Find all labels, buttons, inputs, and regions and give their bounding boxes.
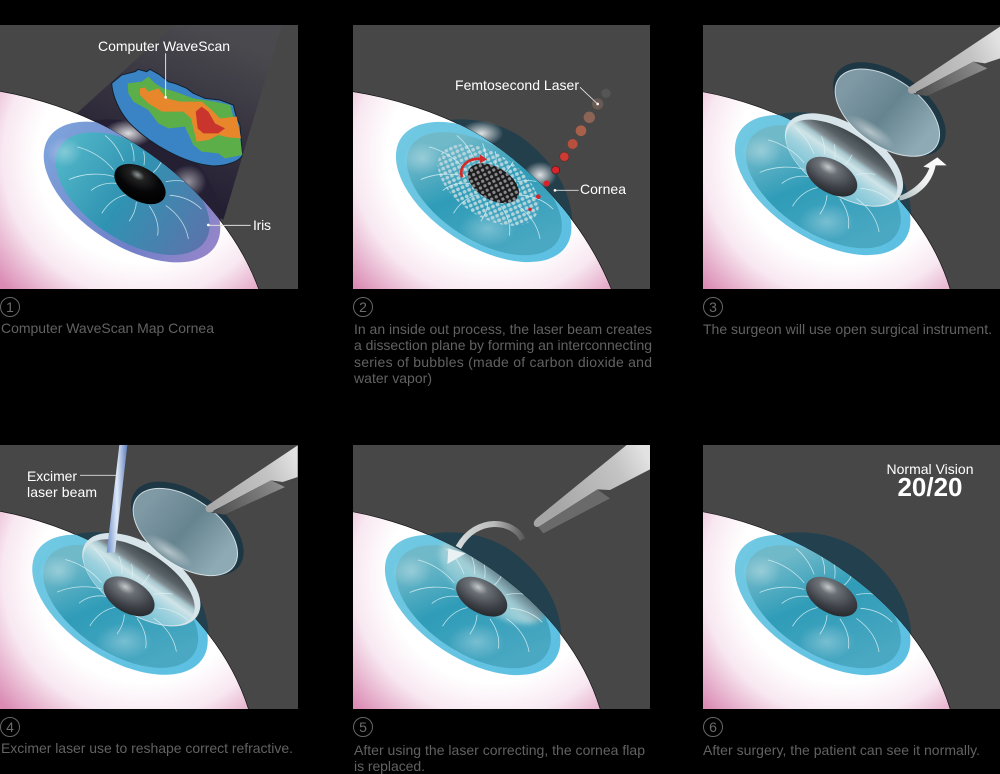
iris bbox=[44, 122, 220, 262]
step 3 number bbox=[704, 298, 722, 316]
step 2 caption: water vapor) bbox=[353, 370, 432, 386]
opened flap bed bbox=[57, 514, 216, 651]
label: laser beam line 2: laser beam bbox=[27, 484, 97, 500]
eyeball bbox=[347, 91, 612, 291]
lifted cornea flap bbox=[114, 462, 260, 595]
iris bbox=[32, 534, 208, 675]
step 3 caption: The surgeon will use open surgical instrument. bbox=[703, 321, 992, 337]
pupil bbox=[107, 156, 173, 212]
scan light cone bbox=[77, 25, 282, 220]
iris details bbox=[410, 549, 542, 652]
laser pulse dots bbox=[528, 89, 611, 211]
iris bbox=[396, 122, 572, 262]
pupil with bubble mesh bbox=[461, 155, 526, 211]
label: iris: Iris bbox=[253, 217, 271, 233]
wavescan map bbox=[112, 69, 242, 166]
lifted cornea flap bbox=[816, 43, 962, 176]
step 5 caption: is replaced. bbox=[354, 758, 425, 774]
label: computer wavescan: Computer WaveScan bbox=[98, 38, 230, 54]
panel 3: flap lifted bbox=[703, 25, 1000, 289]
panel 5: flap replaced bbox=[353, 445, 650, 709]
surgical instrument bbox=[534, 445, 650, 533]
curved return arrow bbox=[447, 524, 523, 564]
step 2 number bbox=[354, 298, 372, 316]
iris bbox=[384, 534, 560, 676]
leader lines bbox=[580, 87, 598, 104]
step 1 caption: Computer WaveScan Map Cornea bbox=[1, 320, 214, 336]
leader lines bbox=[164, 53, 167, 97]
eyeball bbox=[0, 91, 259, 291]
step 4 number: 4 bbox=[6, 719, 14, 735]
step 6 caption: After surgery, the patient can see it normally. bbox=[703, 742, 980, 758]
step 2 caption bbox=[353, 321, 652, 386]
step 6 number: 6 bbox=[709, 719, 717, 735]
label: femtosecond laser: Femtosecond Laser bbox=[455, 77, 579, 93]
iris bbox=[734, 114, 910, 256]
excimer laser beam bbox=[107, 445, 127, 553]
eyeball bbox=[697, 91, 951, 291]
step 2 caption: a dissection plane by forming an interconnecting bbox=[354, 337, 652, 353]
red rotation arrow bbox=[461, 155, 487, 177]
step 5 number bbox=[354, 718, 372, 736]
panel 1: computer wavescan bbox=[0, 25, 298, 291]
step 5 caption: After using the laser correcting, the cornea flap bbox=[354, 742, 645, 758]
surgical instrument bbox=[908, 27, 1000, 96]
eyeball bbox=[347, 511, 601, 711]
step 2 number: 2 bbox=[359, 299, 367, 315]
step 3 number: 3 bbox=[709, 299, 717, 315]
bubble grid bbox=[424, 128, 553, 242]
step 2 caption: series of bubbles (made of carbon dioxide and bbox=[354, 354, 652, 370]
surgical instrument bbox=[206, 445, 298, 515]
label: cornea: Cornea bbox=[580, 181, 626, 197]
opened flap bed bbox=[760, 94, 919, 232]
panel 2: femtosecond laser bbox=[347, 25, 650, 291]
eyeball bbox=[0, 511, 249, 711]
panel 4: excimer laser bbox=[0, 445, 298, 711]
label: normal vision: Normal Vision bbox=[886, 461, 974, 477]
label: excimer laser beam: Excimer bbox=[27, 468, 77, 484]
step 5 caption bbox=[354, 742, 645, 774]
step 1 number bbox=[0, 298, 20, 316]
step 4 number bbox=[0, 718, 20, 736]
step 6 number bbox=[704, 718, 722, 736]
step 5 number: 5 bbox=[359, 719, 367, 735]
step 2 caption: In an inside out process, the laser beam creates bbox=[354, 321, 652, 337]
eyeball bbox=[697, 511, 951, 711]
step 1 number: 1 bbox=[6, 299, 14, 315]
panel 6: normal vision bbox=[697, 445, 1000, 711]
step 4 caption: Excimer laser use to reshape correct refractive. bbox=[1, 740, 293, 756]
iris and pupil bbox=[760, 549, 892, 652]
iris bbox=[734, 534, 910, 676]
label: 20/20: 20/20 bbox=[897, 472, 963, 502]
arrow bbox=[899, 157, 947, 201]
